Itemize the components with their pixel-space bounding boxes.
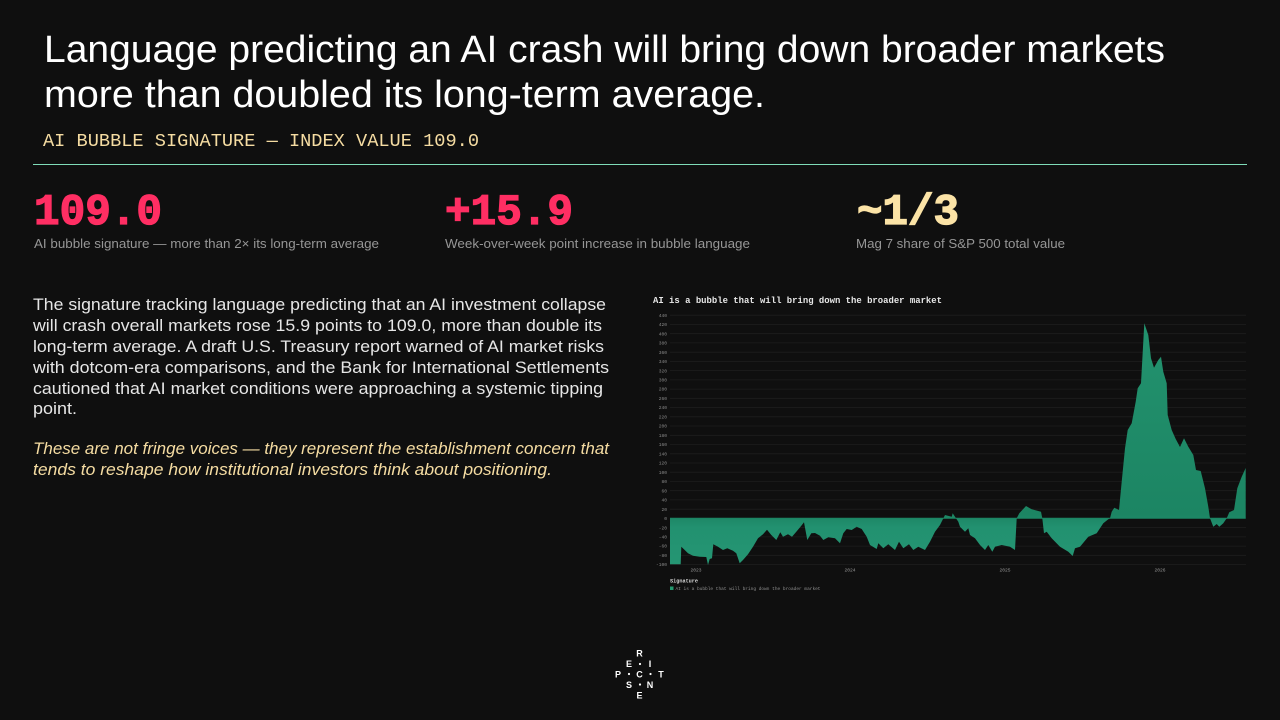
- stat: weekly increase: +15.9: [445, 188, 573, 238]
- y axis labels: 40: [661, 498, 667, 504]
- body text: The signature tracking language predicting that an AI investment collapse: [33, 295, 606, 314]
- title: more than doubled its long-term average.: [44, 74, 765, 116]
- y axis labels: 140: [659, 451, 667, 457]
- logo: R: [636, 648, 643, 658]
- y axis labels: 340: [659, 359, 667, 365]
- y axis labels: 440: [659, 313, 667, 319]
- logo: E: [626, 659, 632, 669]
- italic callout: These are not fringe voices — they represent the establishment concern that: [33, 439, 610, 458]
- stat: index value: [34, 188, 379, 251]
- y axis labels: 80: [661, 479, 667, 485]
- stat: index value: AI bubble signature — more than 2× its long-term average: [34, 237, 379, 251]
- x axis labels: [690, 568, 1166, 574]
- y axis labels: 360: [659, 350, 667, 356]
- y axis labels: -80: [659, 553, 667, 559]
- logo: N: [647, 680, 653, 690]
- y axis labels: 0: [664, 516, 667, 522]
- title: [44, 29, 1165, 116]
- logo: S: [626, 680, 632, 690]
- x axis labels: 2025: [999, 568, 1011, 574]
- italic callout: [33, 439, 610, 479]
- stat: Mag 7 share: [856, 188, 1065, 251]
- stat: weekly increase: [445, 188, 750, 251]
- y axis labels: 300: [659, 378, 667, 384]
- italic callout: tends to reshape how institutional investors think about positioning.: [33, 460, 552, 479]
- y axis labels: 120: [659, 461, 667, 467]
- logo: T: [658, 670, 664, 680]
- logo: C: [636, 670, 643, 680]
- y axis labels: 220: [659, 414, 667, 420]
- y axis labels: 380: [659, 341, 667, 347]
- stat: weekly increase: Week-over-week point increase in bubble language: [445, 237, 750, 251]
- legend: [670, 578, 821, 592]
- chart: AI bubble signature area chart: [653, 296, 1246, 592]
- stat: Mag 7 share: ~1/3: [857, 188, 959, 238]
- y axis labels: [656, 313, 667, 568]
- x axis labels: 2026: [1154, 568, 1166, 574]
- y axis labels: -60: [659, 544, 667, 550]
- y axis labels: 260: [659, 396, 667, 402]
- y axis labels: 100: [659, 470, 667, 476]
- y axis labels: 160: [659, 442, 667, 448]
- stat: Mag 7 share: Mag 7 share of S&P 500 total value: [856, 237, 1065, 251]
- body text: point.: [33, 399, 77, 418]
- x axis labels: 2024: [844, 568, 856, 574]
- x axis labels: 2023: [690, 568, 702, 574]
- legend: Signature: [670, 578, 698, 584]
- body text: cautioned that AI market conditions were approaching a systemic tipping: [33, 379, 603, 398]
- y axis labels: 60: [661, 488, 667, 494]
- logo: I: [649, 659, 651, 669]
- logo: E: [636, 690, 643, 700]
- y axis labels: 320: [659, 368, 667, 374]
- legend: AI is a bubble that will bring down the broader market: [676, 586, 821, 592]
- body text: will crash overall markets rose 15.9 points to 109.0, more than double its: [32, 316, 602, 335]
- subtitle: AI BUBBLE SIGNATURE — INDEX VALUE 109.0: [43, 131, 479, 152]
- logo: P: [615, 670, 621, 680]
- y axis labels: 200: [659, 424, 667, 430]
- body text: long-term average. A draft U.S. Treasury report warned of AI market risks: [33, 337, 604, 356]
- y axis labels: 420: [659, 322, 667, 328]
- y axis labels: 180: [659, 433, 667, 439]
- y axis labels: -100: [656, 562, 667, 568]
- logo: [615, 648, 664, 700]
- body text: with dotcom-era comparisons, and the Bank for International Settlements: [32, 358, 609, 377]
- body text: [32, 295, 609, 418]
- y axis labels: -40: [659, 534, 667, 540]
- y axis labels: 400: [659, 331, 667, 337]
- title: Language predicting an AI crash will bring down broader markets: [44, 29, 1165, 71]
- y axis labels: -20: [659, 525, 667, 531]
- y axis labels: 240: [659, 405, 667, 411]
- y axis labels: 20: [661, 507, 667, 513]
- area series: [670, 323, 1246, 565]
- stat: index value: 109.0: [34, 188, 162, 238]
- y axis labels: 280: [659, 387, 667, 393]
- chart title: AI is a bubble that will bring down the broader market: [653, 296, 942, 306]
